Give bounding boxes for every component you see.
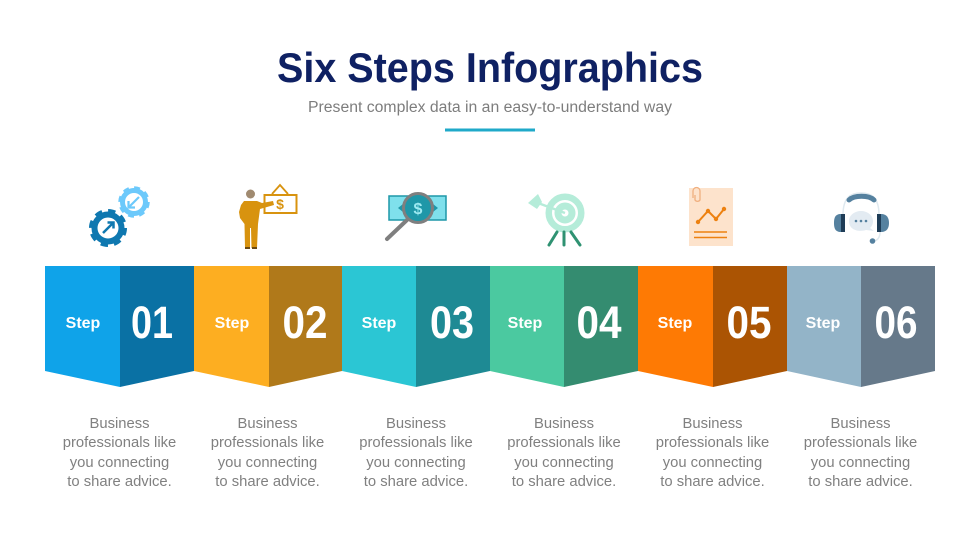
icon: banknote under magnifying glass [387,194,446,239]
step 03 description: professionals like [359,435,473,451]
step 06 description: Business [830,416,891,432]
step 05 description: to share advice. [660,474,765,490]
icon: gears with arrows [90,188,148,246]
step 05 description: you connecting [663,455,762,471]
step 03 banner: Step [362,315,397,332]
step 01 description: to share advice. [67,474,172,490]
step 04 description [507,416,621,490]
step 01 banner [45,266,194,387]
step 05 description: professionals like [656,435,769,451]
step 01 banner: 01 [131,297,173,348]
step 04 description: professionals like [507,435,621,451]
icon: banknote under magnifying glass: $ [414,201,423,218]
step 03 description [359,416,473,490]
step 03 banner [342,266,490,387]
step 01 banner: Step [66,315,101,332]
icon: presenter with dollar sign [239,185,296,249]
step 02 description: you connecting [218,455,317,471]
step 05 banner: Step [658,315,693,332]
step 06 description: you connecting [811,455,910,471]
step 06 banner: Step [806,315,841,332]
step 05 banner: 05 [726,297,772,348]
step 03 description: to share advice. [364,474,468,490]
step 05 description: Business [682,416,743,432]
step 02 description: to share advice. [215,474,320,490]
step 02 banner [194,266,342,387]
title: Six Steps Infographics [277,44,703,91]
step 01 description [63,416,176,490]
title accent line [445,128,535,132]
subtitle: Present complex data in an easy-to-understand way [308,99,672,116]
step 04 banner: Step [508,315,543,332]
icon: presenter with dollar sign: $ [276,196,284,212]
icon: headset with speech bubble [834,193,889,244]
step 02 banner: 02 [282,297,328,348]
step 03 description: Business [386,416,446,432]
step 03 banner: 03 [430,297,474,348]
icon: target with arrow [528,194,581,245]
step 04 description: Business [534,416,594,432]
step 02 description [211,416,324,490]
step 02 description: Business [237,416,298,432]
step 04 banner: 04 [576,297,622,348]
step 06 description: professionals like [804,435,917,451]
step 06 banner [787,266,935,387]
step 04 description: you connecting [514,455,614,471]
step 03 description: you connecting [366,455,466,471]
step 06 description [804,416,917,490]
step 06 banner: 06 [874,297,918,348]
step 04 description: to share advice. [512,474,616,490]
step 05 banner [638,266,787,387]
step 01 description: professionals like [63,435,176,451]
step 04 banner [490,266,638,387]
step 01 description: you connecting [70,455,169,471]
step 01 description: Business [89,416,150,432]
icon: report with line chart [689,188,733,246]
step 05 description [656,416,769,490]
step 02 description: professionals like [211,435,324,451]
step 02 banner: Step [215,315,250,332]
step 06 description: to share advice. [808,474,913,490]
